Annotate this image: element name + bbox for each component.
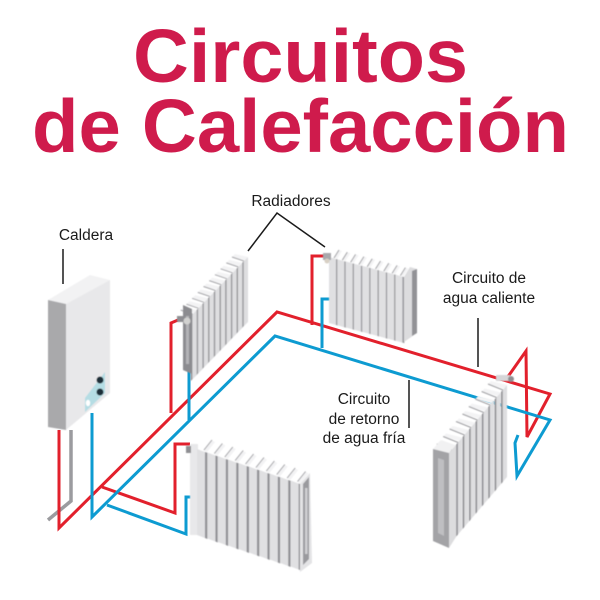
label: cold water return circuit: de retorno (329, 411, 399, 428)
label: hot water circuit: Circuito de (452, 270, 526, 287)
label: cold water return circuit: Circuito (338, 391, 390, 408)
valve (496, 375, 514, 382)
cold water return circuit (blue pipes) (92, 299, 550, 534)
boiler (48, 275, 110, 430)
title: de Calefacción (32, 84, 569, 168)
gray drain pipe (48, 430, 71, 520)
label: cold water return circuit: de agua fría (323, 430, 406, 447)
label: Radiadores: Radiadores (251, 193, 331, 210)
boiler control panel (85, 372, 105, 412)
title: Circuitos (133, 14, 468, 98)
valve (177, 316, 190, 324)
label: hot water circuit: agua caliente (443, 290, 535, 307)
radiator: back right (323, 250, 417, 343)
label: cold water return circuit (323, 391, 406, 447)
radiator: front left (186, 440, 312, 572)
radiator: front right (433, 375, 514, 548)
valve (323, 253, 331, 264)
radiator: back left (177, 254, 248, 381)
title (32, 14, 569, 168)
hot water circuit (red pipes) (59, 256, 550, 528)
leader lines (63, 213, 478, 428)
label: Caldera: Caldera (59, 227, 114, 244)
valve (186, 446, 191, 453)
label: hot water circuit (443, 270, 535, 307)
